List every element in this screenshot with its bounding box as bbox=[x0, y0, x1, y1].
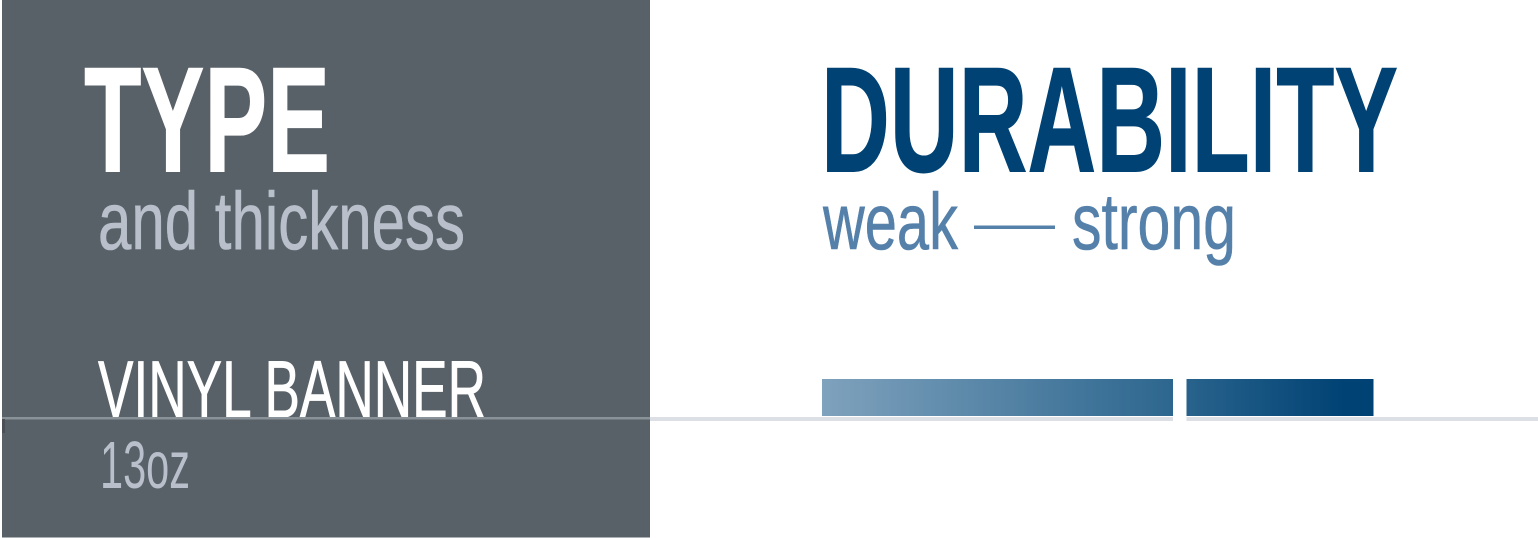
scale caption: weak to strong bbox=[822, 177, 1236, 266]
heading: TYPE: TYPE bbox=[84, 36, 330, 204]
subheading: and thickness: and thickness bbox=[98, 176, 465, 267]
scale caption: weak to strong: weak bbox=[822, 177, 959, 266]
label: vinyl banner: VINYL BANNER bbox=[98, 345, 486, 435]
label: 13oz: 13oz bbox=[100, 428, 190, 503]
divider line bbox=[2, 417, 1538, 433]
scale caption: weak to strong: strong bbox=[1072, 177, 1236, 266]
durability bar bbox=[822, 379, 1374, 423]
